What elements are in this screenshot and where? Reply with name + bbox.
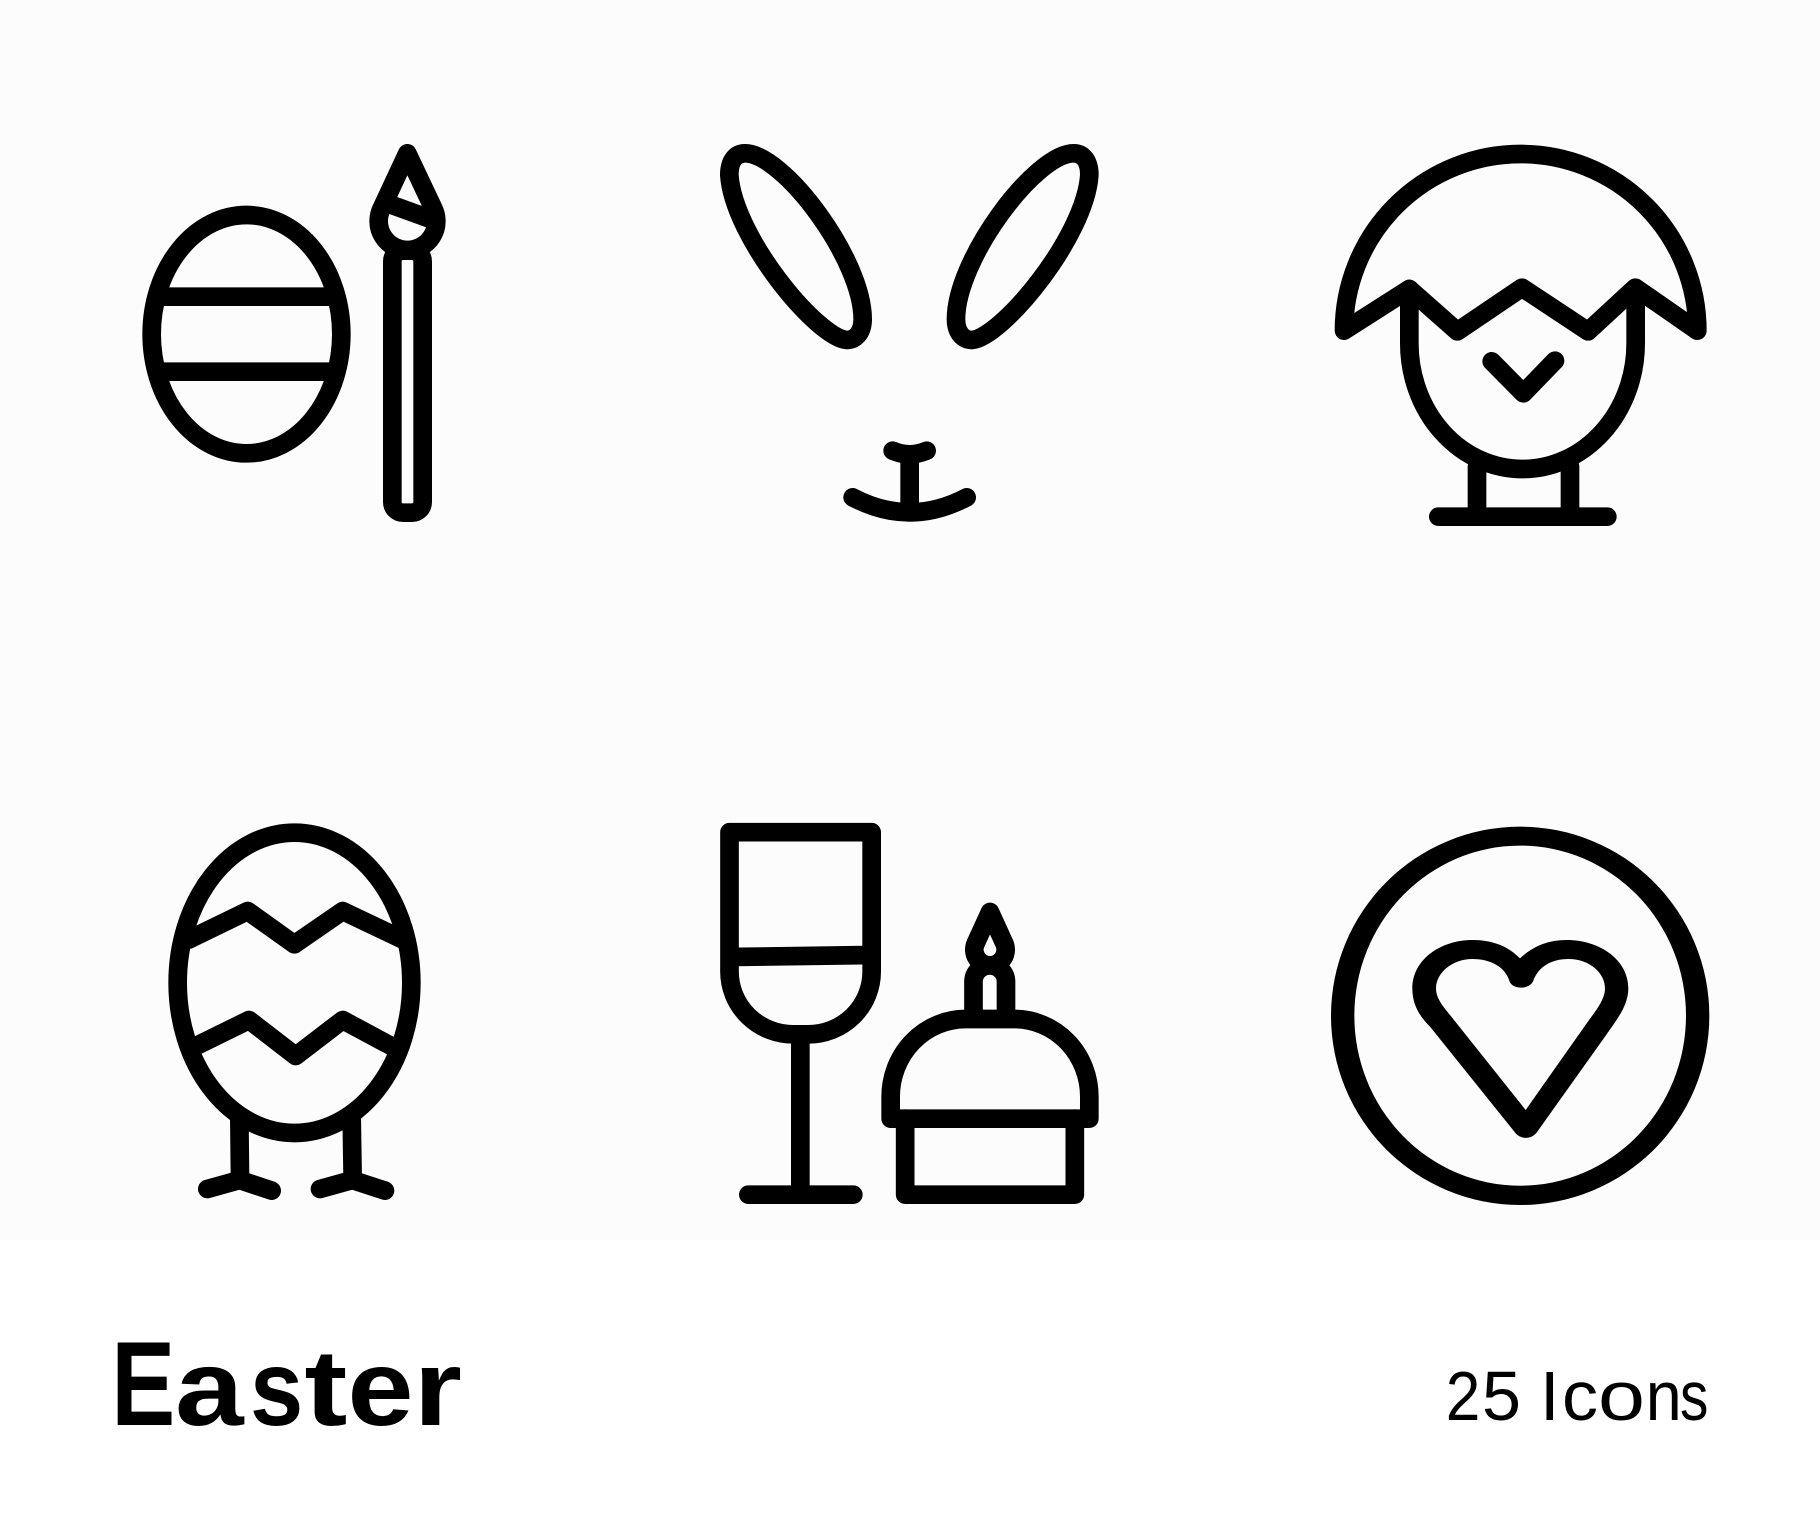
nose and mouth [853, 451, 967, 512]
icon: striped egg and paint brush [152, 153, 436, 513]
paint brush [379, 153, 436, 513]
left ear [729, 153, 863, 340]
eggshell top [1344, 154, 1697, 331]
legs and feet [207, 1117, 385, 1191]
candle and flame [973, 912, 1006, 1019]
beak [1492, 361, 1555, 393]
title: a [175, 1327, 245, 1448]
icon count label: o [1598, 1357, 1645, 1435]
icon count label: s [1680, 1357, 1708, 1435]
icon: heart in a circle [1331, 827, 1709, 1205]
striped egg [152, 215, 341, 453]
title: r [414, 1327, 462, 1448]
wine glass [729, 832, 872, 1195]
title: e [348, 1327, 414, 1448]
heart [1412, 940, 1628, 1138]
icon count label: n [1646, 1357, 1682, 1435]
icon count label: c [1562, 1357, 1598, 1435]
circle ring [1331, 827, 1709, 1205]
right ear [956, 153, 1089, 340]
icon count label: 5 [1482, 1357, 1521, 1435]
icon: chick hatching from shell [1344, 154, 1697, 517]
zigzag bands [187, 911, 407, 1056]
icon count label: I [1540, 1357, 1560, 1435]
legs and ground [1438, 467, 1607, 517]
icon: wine glass and Easter cake with candle [729, 832, 1089, 1195]
title: E [111, 1317, 175, 1451]
icon: bunny face [729, 153, 1089, 512]
chick body [1409, 289, 1636, 469]
icon: zigzag egg with feet [178, 833, 411, 1191]
title: t [304, 1327, 347, 1448]
Easter cake [891, 1019, 1089, 1195]
egg outline [178, 833, 411, 1133]
title: s [250, 1327, 303, 1448]
icon count label: 2 [1446, 1357, 1480, 1435]
